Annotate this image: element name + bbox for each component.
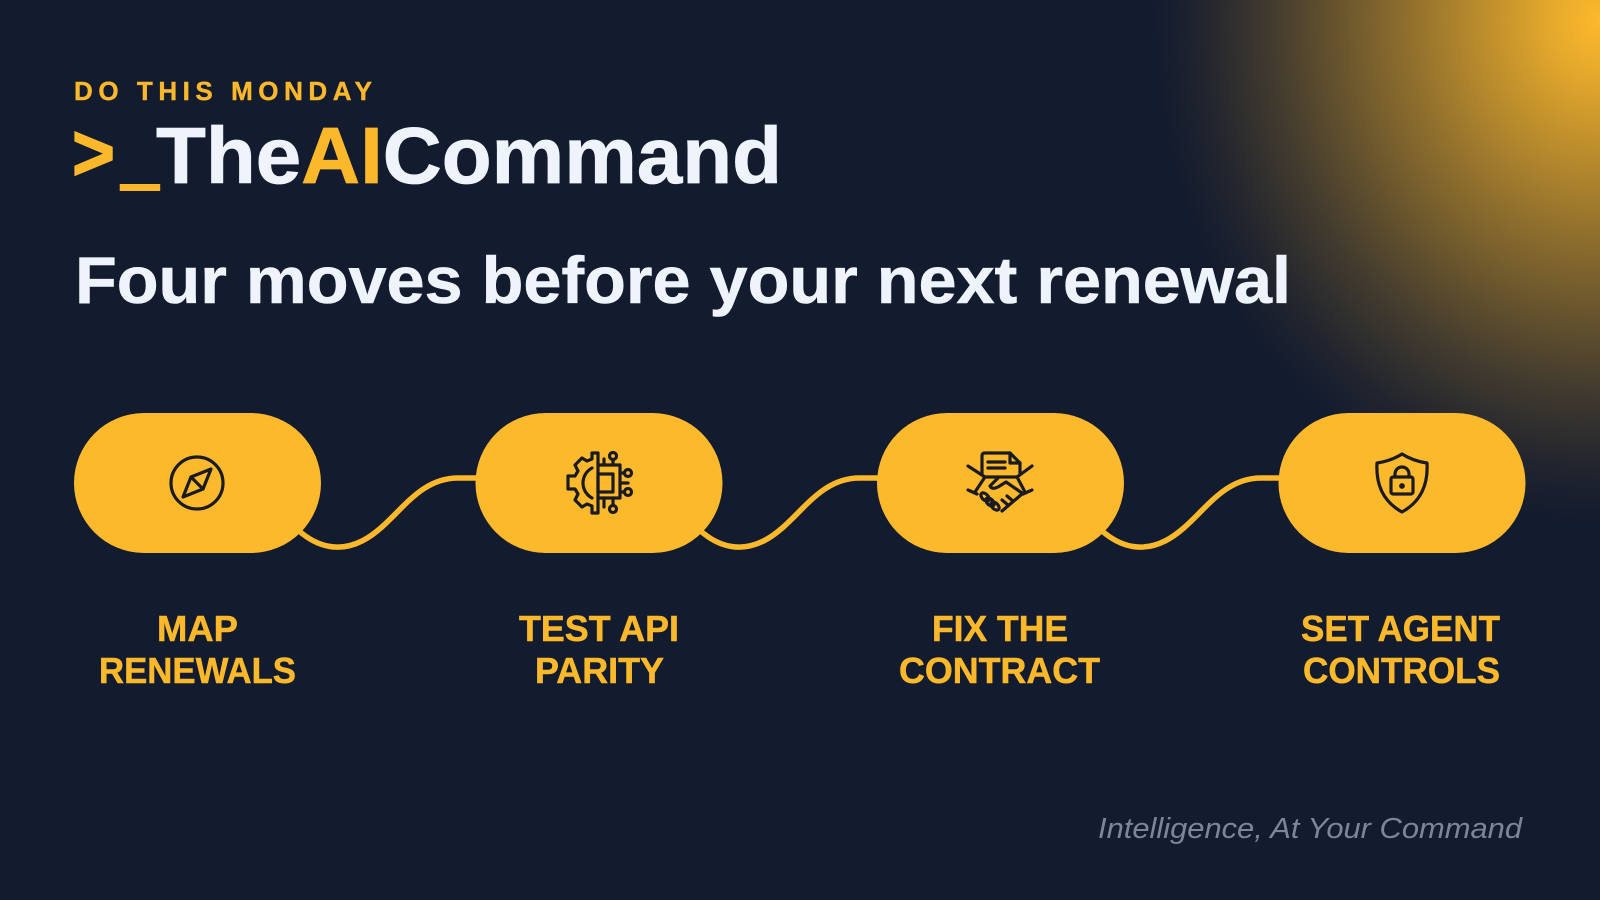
icon: gear and chip [568,452,632,513]
icon: shield with lock [1377,454,1427,512]
label: set agent controls: SET AGENT [1301,608,1500,649]
eyebrow: do this monday: DO THIS MONDAY [74,76,372,106]
label: map renewals [99,608,296,691]
icon: compass [171,457,223,509]
connector: step 2 to step 3 [700,478,882,547]
prompt underscore: _ [121,107,159,196]
label: test api parity [519,608,679,691]
label: fix the contract: CONTRACT [899,650,1100,691]
label: fix the contract [899,608,1100,691]
connector: step 1 to step 2 [298,478,480,547]
label: test api parity: TEST API [519,608,679,649]
step 4 pill: set agent controls [1278,413,1526,553]
label: test api parity: PARITY [535,650,664,691]
step 3 pill: fix the contract [877,413,1124,553]
headline: Four moves before your next renewal [75,243,1291,317]
label: map renewals: MAP [157,608,238,649]
connector: step 3 to step 4 [1101,478,1283,547]
prompt chevron: > [72,108,115,197]
label: fix the contract: FIX THE [932,608,1068,649]
brand logo: >_TheAICommand [72,107,782,200]
label: map renewals: RENEWALS [99,650,296,691]
label: set agent controls [1301,608,1500,691]
step 1 pill: map renewals [74,413,321,553]
wordmark: TheAICommand [156,111,782,200]
step 2 pill: test api parity [476,413,722,553]
tagline: Intelligence, At Your Command [1098,813,1523,845]
label: set agent controls: CONTROLS [1303,650,1500,691]
icon: contract and handshake [968,453,1032,512]
